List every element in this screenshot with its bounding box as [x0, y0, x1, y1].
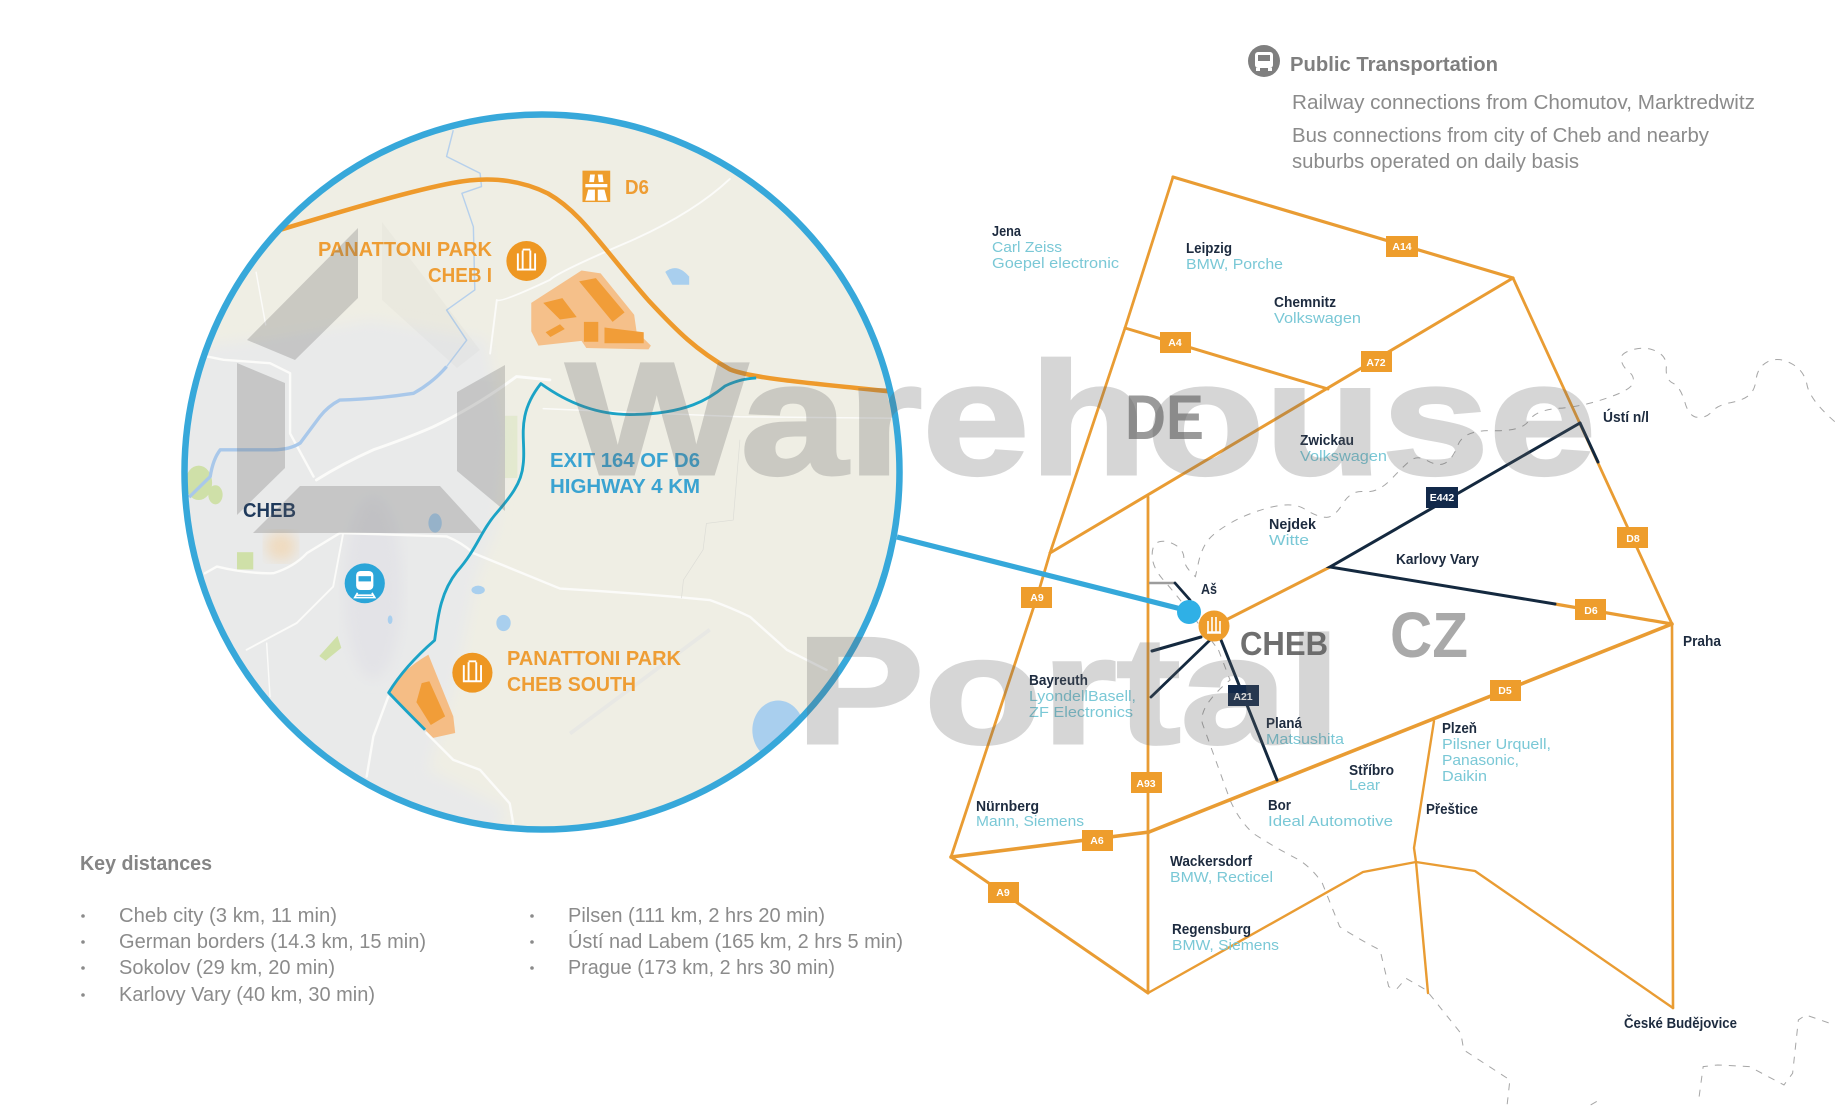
road badges: D8: [1626, 533, 1640, 545]
city labels: Aš: [1201, 582, 1217, 598]
map base: [185, 115, 899, 829]
road badges: A72: [1366, 357, 1386, 369]
park Cheb I area: [531, 270, 651, 349]
city labels: Planá: [1266, 716, 1303, 732]
city labels: Matsushita: [1266, 731, 1345, 748]
city labels: Lear: [1349, 777, 1380, 794]
thin track: [682, 440, 740, 598]
city labels: Bayreuth: [1029, 673, 1088, 689]
map labels: EXIT 164 OF D6: [550, 450, 700, 472]
connecting roads: [1149, 423, 1598, 780]
list: distances left column: German borders (14.3 km, 15 min): [119, 931, 426, 953]
road badges: [988, 236, 1648, 903]
road badges: D5: [1498, 685, 1512, 697]
watermark logo: [237, 222, 505, 533]
dashed border south: [1202, 650, 1835, 1106]
road badges: A6: [1090, 835, 1104, 847]
city labels: Nürnberg: [976, 799, 1039, 815]
city labels: Bor: [1268, 798, 1291, 814]
road badges: A4: [1168, 337, 1182, 349]
city labels: Karlovy Vary: [1396, 552, 1479, 568]
country label: DE: DE: [1125, 383, 1204, 453]
park Cheb South area: [389, 655, 455, 738]
map labels: [243, 177, 700, 696]
watermark text: [566, 329, 1596, 776]
city labels: ZF Electronics: [1029, 704, 1133, 721]
city labels: České Budějovice: [1624, 1014, 1737, 1032]
list: distances right column: Prague (173 km, 2 hrs 30 min): [568, 957, 835, 979]
icon: train: [345, 563, 385, 603]
connector from zoom circle to Cheb: [897, 537, 1189, 611]
city labels: Leipzig: [1186, 241, 1232, 257]
city labels: Goepel electronic: [992, 255, 1120, 272]
icon: motorway D6: [582, 171, 610, 202]
city labels: BMW, Siemens: [1172, 937, 1279, 954]
circle outline: [184, 114, 900, 830]
exit route: [389, 378, 756, 730]
panel: key distances: [80, 853, 903, 1006]
city labels: Ústí n/l: [1603, 408, 1649, 426]
city labels: Pilsner Urquell,: [1442, 736, 1551, 753]
city labels: [976, 224, 1737, 1032]
city labels: BMW, Porche: [1186, 256, 1283, 273]
label: CHEB: CHEB: [1240, 625, 1328, 662]
map details: [170, 130, 902, 846]
list: distances left column: Cheb city (3 km, 11 min): [119, 905, 337, 927]
city labels: Stříbro: [1349, 763, 1394, 779]
road badges: E442: [1430, 492, 1454, 504]
city labels: Zwickau: [1300, 433, 1354, 449]
dashed border lines: [1152, 348, 1835, 650]
lake near motorway: [665, 268, 689, 285]
lakes: [388, 513, 804, 760]
watermark text: Portal: [796, 606, 1341, 776]
map labels: PANATTONI PARK: [507, 648, 682, 670]
runway strip: [570, 630, 710, 734]
river lower: [189, 367, 447, 497]
city labels: Ideal Automotive: [1268, 813, 1393, 830]
road badges: A21: [1233, 691, 1253, 703]
map labels: HIGHWAY 4 KM: [550, 476, 700, 498]
city labels: Chemnitz: [1274, 295, 1336, 311]
city labels: Regensburg: [1172, 922, 1251, 938]
road badges: A93: [1136, 778, 1156, 790]
list: distances left column: [81, 905, 426, 1006]
rail corridor: [345, 497, 402, 679]
text: railway connections: Railway connections from Chomutov, Marktredwitz: [1292, 92, 1755, 114]
icon: bus: [1248, 45, 1280, 77]
road network map: [951, 177, 1673, 1008]
panel: public transportation: [1248, 45, 1755, 173]
list: distances right column: Ústí nad Labem (165 km, 2 hrs 5 min): [568, 930, 903, 953]
marker: blue dot: [1177, 600, 1201, 624]
panel: zoomed location circle map: [170, 114, 902, 846]
city labels: Přeštice: [1426, 802, 1478, 818]
icons on zoomed map: [345, 171, 610, 693]
city labels: Jena: [992, 224, 1022, 240]
city labels: Witte: [1269, 532, 1309, 549]
city labels: LyondellBasell,: [1029, 688, 1136, 705]
list: distances left column: Karlovy Vary (40 km, 30 min): [119, 984, 375, 1006]
icon: park Cheb South: [452, 653, 493, 693]
map labels: PANATTONI PARK: [318, 239, 493, 261]
city labels: Mann, Siemens: [976, 813, 1084, 830]
city labels: Plzeň: [1442, 721, 1477, 737]
city labels: Wackersdorf: [1170, 854, 1252, 870]
roads: [184, 179, 893, 823]
map labels: CHEB I: [428, 265, 492, 287]
icon: Cheb park marker: [1198, 610, 1230, 642]
city labels: Volkswagen: [1300, 448, 1387, 465]
map labels: CHEB SOUTH: [507, 674, 636, 696]
D6 motorway: [278, 179, 902, 393]
city labels: Daikin: [1442, 768, 1487, 785]
watermark text: Warehouse: [566, 329, 1596, 508]
city labels: Nejdek: [1269, 517, 1317, 533]
list: distances left column: Sokolov (29 km, 20 min): [119, 957, 335, 979]
heading: public transportation: Public Transportation: [1290, 54, 1498, 76]
green patches: [185, 416, 517, 661]
motorway lines: [951, 177, 1673, 1008]
river upper: [447, 130, 482, 367]
road badges: D6: [1584, 605, 1598, 617]
list: distances right column: [530, 905, 903, 979]
road badges: A9: [996, 887, 1010, 899]
city labels: Panasonic,: [1442, 752, 1519, 769]
map labels: CHEB: [243, 500, 296, 522]
country label: CZ: CZ: [1390, 599, 1468, 671]
list: distances right column: Pilsen (111 km, 2 hrs 20 min): [568, 905, 825, 927]
heading: key distances: Key distances: [80, 853, 212, 875]
orange glow: [266, 532, 296, 561]
urban area: [170, 320, 505, 846]
road badges: A9: [1030, 592, 1044, 604]
city labels: Volkswagen: [1274, 310, 1361, 327]
city labels: Carl Zeiss: [992, 239, 1062, 256]
map labels: D6: [625, 177, 649, 199]
icon: park Cheb I: [506, 241, 547, 281]
city labels: BMW, Recticel: [1170, 869, 1273, 886]
text: bus connections: Bus connections from city of Cheb and nearby: [1292, 125, 1709, 147]
road badges: A14: [1392, 241, 1412, 253]
text: bus connections second line: suburbs operated on daily basis: [1292, 151, 1579, 173]
city labels: Praha: [1683, 634, 1722, 650]
